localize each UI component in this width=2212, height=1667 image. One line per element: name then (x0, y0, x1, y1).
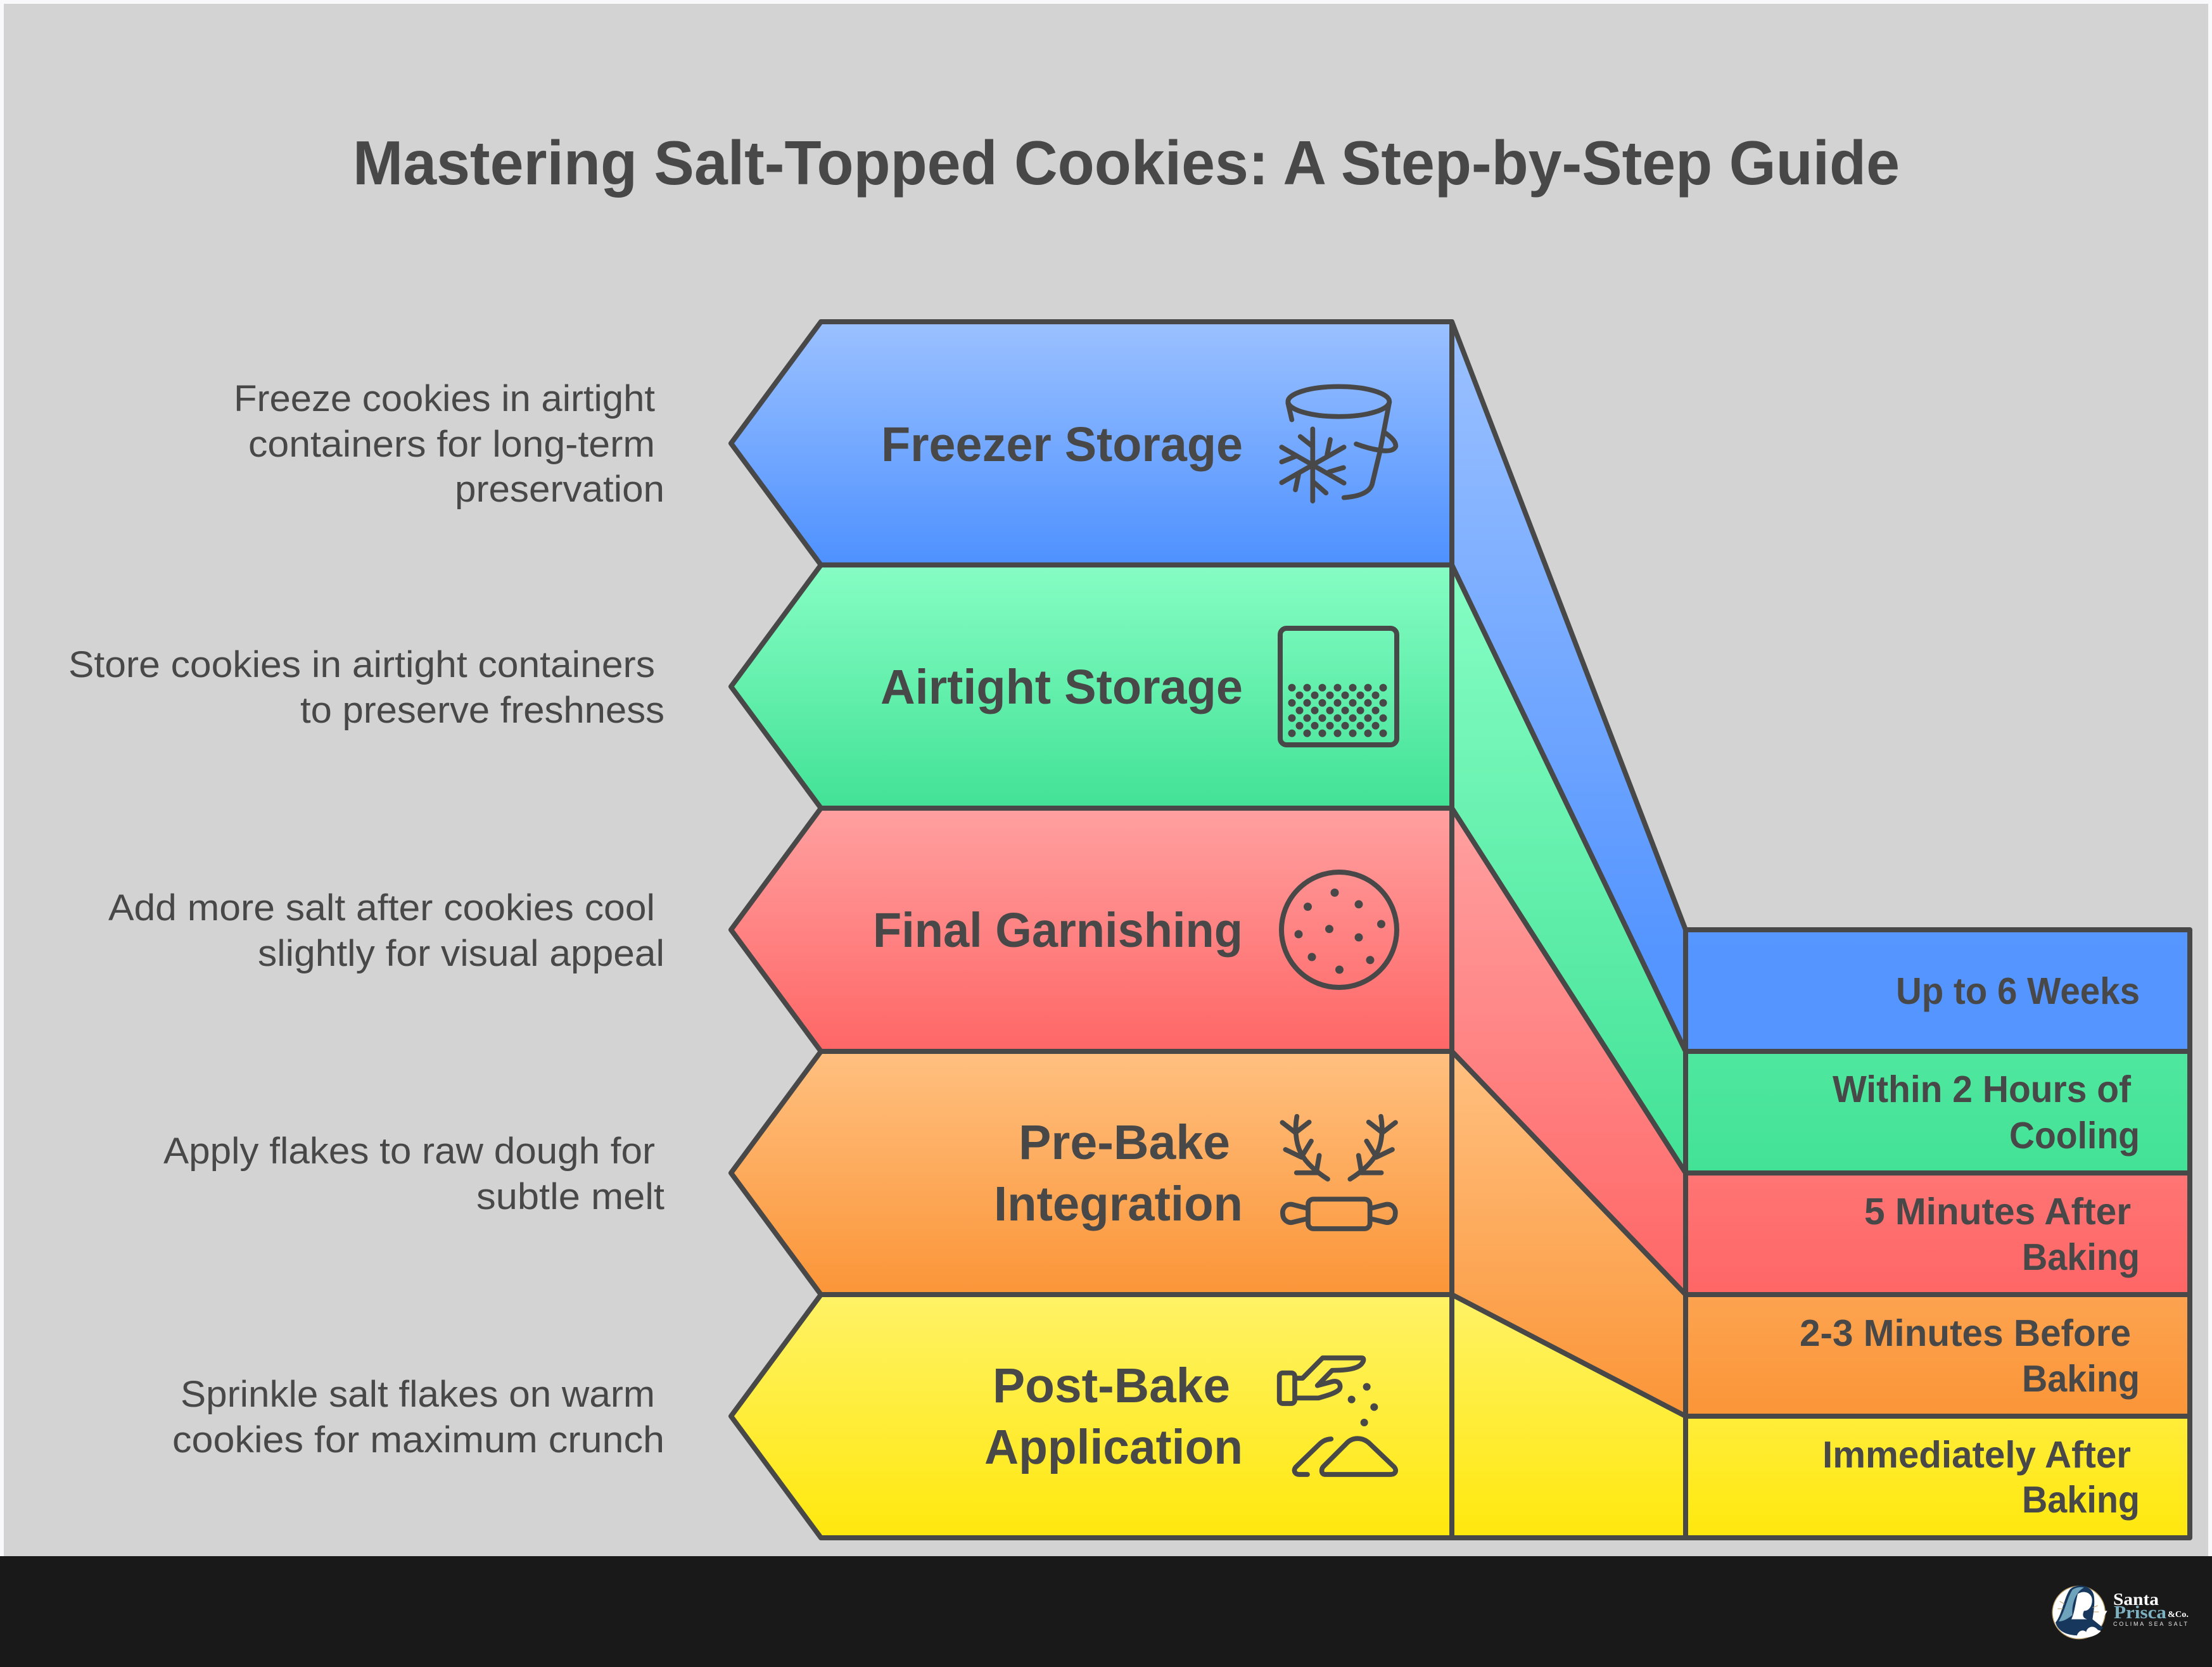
time text: within 2 hours of cooling (1833, 1068, 2140, 1157)
icon: cookie (1281, 872, 1397, 987)
time text: immediately after baking (1822, 1434, 2140, 1521)
description: post-bake application: Sprinkle salt flakes on warm (181, 1374, 655, 1415)
description: pre-bake integration (163, 1131, 664, 1217)
chevron: post-bake application (731, 1295, 1452, 1538)
time box: within 2 hours (1686, 1051, 2190, 1173)
description: final garnishing (108, 887, 664, 974)
chevron: freezer storage (731, 322, 1452, 565)
label: final garnishing: Final Garnishing (873, 903, 1243, 958)
logo emblem (2052, 1586, 2107, 1639)
time text: immediately after baking: Baking (2022, 1479, 2140, 1521)
time text: within 2 hours of cooling: Cooling (2009, 1115, 2140, 1157)
icon: container with salt dots (1280, 628, 1397, 745)
description: post-bake application: cookies for maximum crunch (172, 1419, 664, 1461)
description: final garnishing: Add more salt after cookies cool (108, 887, 655, 929)
connector band: final garnishing (1452, 808, 1686, 1295)
logo wordmark: Prisca (2114, 1602, 2167, 1623)
description: freezer storage: containers for long-term (248, 424, 655, 465)
logo wordmark: &Co. (2168, 1610, 2189, 1619)
title: Mastering Salt-Topped Cookies: A Step-by-Step Guide (353, 128, 1900, 198)
time text: 5 minutes after baking (1864, 1191, 2140, 1278)
footer bar (0, 1556, 2212, 1667)
time text: 5 minutes after baking: 5 Minutes After (1864, 1191, 2131, 1233)
chevron: pre-bake integration (731, 1051, 1452, 1295)
panel: airtight storage (68, 565, 2190, 1173)
connector band: airtight storage (1452, 565, 1686, 1173)
icon: sprigs and rolling pin (1282, 1117, 1395, 1229)
label: airtight storage: Airtight Storage (880, 660, 1243, 714)
logo wordmark: COLIMA SEA SALT (2113, 1621, 2188, 1627)
description: final garnishing: slightly for visual appeal (258, 933, 664, 974)
label: post-bake application: Post-Bake (993, 1359, 1230, 1413)
description: airtight storage: to preserve freshness (300, 690, 664, 731)
panel: post-bake application (172, 1295, 2190, 1538)
label: pre-bake integration: Pre-Bake (1019, 1115, 1230, 1170)
label: post-bake application (984, 1359, 1243, 1474)
time text: 2-3 minutes before baking (1800, 1312, 2140, 1400)
description: airtight storage (68, 644, 664, 731)
chevron: airtight storage (731, 565, 1452, 808)
description: freezer storage (234, 378, 664, 510)
icon: frozen bucket with snowflake (1281, 386, 1395, 501)
time text: 2-3 minutes before baking: 2-3 Minutes Before (1800, 1312, 2131, 1354)
time text: 5 minutes after baking: Baking (2022, 1236, 2140, 1278)
logo wordmark: Santa (2113, 1590, 2159, 1609)
chevron: final garnishing (731, 808, 1452, 1051)
description: freezer storage: preservation (455, 469, 664, 510)
description: freezer storage: Freeze cookies in airtight (234, 378, 655, 419)
time text: 2-3 minutes before baking: Baking (2022, 1358, 2140, 1400)
time text: up to 6 weeks: Up to 6 Weeks (1896, 970, 2140, 1012)
label: freezer storage: Freezer Storage (881, 417, 1243, 472)
logo: Santa Prisca and Co. (2052, 1586, 2189, 1639)
time box: 2-3 minutes before baking (1686, 1295, 2190, 1416)
connector band: freezer storage (1452, 322, 1686, 1051)
time box: up to 6 weeks (1686, 930, 2190, 1051)
panel: final garnishing (108, 808, 2190, 1295)
time text: within 2 hours of cooling: Within 2 Hours of (1833, 1068, 2131, 1110)
time box: immediately after baking (1686, 1416, 2190, 1538)
description: airtight storage: Store cookies in airtight containers (68, 644, 655, 685)
connector band: pre-bake integration (1452, 1051, 1686, 1416)
label: pre-bake integration (994, 1115, 1243, 1231)
description: pre-bake integration: subtle melt (476, 1176, 664, 1217)
time text: immediately after baking: Immediately After (1822, 1434, 2131, 1476)
description: post-bake application (172, 1374, 664, 1461)
label: pre-bake integration: Integration (994, 1177, 1243, 1231)
panel: pre-bake integration (163, 1051, 2190, 1416)
connector band: post-bake application (1452, 1295, 1686, 1538)
time box: 5 minutes after baking (1686, 1173, 2190, 1295)
logo wordmark (2113, 1590, 2189, 1627)
description: pre-bake integration: Apply flakes to raw dough for (163, 1131, 655, 1172)
panel: freezer storage (234, 322, 2190, 1051)
icon: hand sprinkling salt on a pile (1280, 1358, 1395, 1474)
label: post-bake application: Application (984, 1420, 1243, 1474)
